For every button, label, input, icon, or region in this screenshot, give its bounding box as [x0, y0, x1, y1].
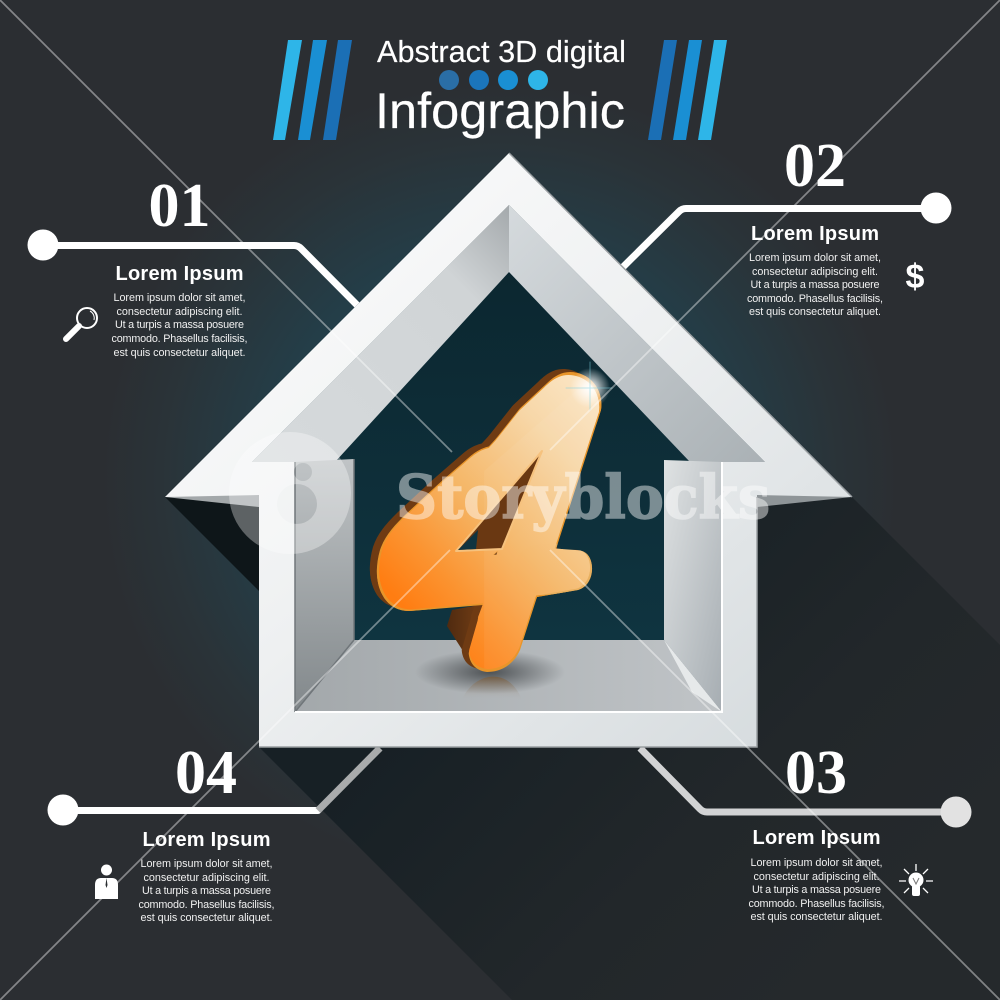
text block 03: consectetur adipiscing elit.	[754, 871, 880, 883]
numeral 4	[370, 362, 612, 672]
numeral: sparkle	[566, 362, 612, 410]
house	[165, 153, 852, 747]
text block 04: est quis consectetur aliquet.	[140, 912, 272, 924]
house: left underside	[165, 495, 259, 507]
icon: magnifier	[66, 308, 97, 339]
text block 02: commodo. Phasellus facilisis,	[747, 293, 883, 305]
text block 02: consectetur adipiscing elit.	[752, 266, 878, 278]
number 04: 04	[175, 739, 237, 807]
text block 03: Lorem ipsum dolor sit amet,	[750, 857, 882, 869]
house: right wall highlight	[664, 640, 722, 712]
icon: business person	[95, 864, 118, 899]
text block 03	[748, 827, 884, 923]
numeral: counter background sliver	[458, 530, 478, 550]
text block 04: consectetur adipiscing elit.	[144, 872, 270, 884]
house: right inner wall	[664, 460, 722, 712]
house: white frame	[165, 153, 852, 747]
numeral: brown back face: 4	[326, 306, 655, 743]
text block 03: Lorem Ipsum	[752, 827, 880, 849]
title text	[375, 35, 626, 139]
text block 02: Lorem Ipsum	[751, 223, 879, 245]
floor shadow under numeral	[415, 650, 565, 700]
house: right underside	[757, 495, 852, 507]
house: floor	[295, 640, 722, 712]
number 02: 02	[784, 132, 846, 200]
watermark wordmark: Storyblocks	[396, 463, 770, 533]
number 03: 03	[785, 739, 847, 807]
watermark logo circle	[229, 432, 351, 554]
numeral: counter	[456, 451, 542, 551]
numeral: orange rim	[376, 372, 602, 672]
long flat shadow of the house	[165, 497, 1000, 1000]
title dots	[439, 70, 548, 90]
text block 01: Lorem Ipsum	[116, 263, 244, 285]
text block 02	[747, 223, 883, 318]
numeral: brown back face	[370, 369, 579, 668]
icon: light bulb	[899, 864, 933, 896]
text block 01: Lorem ipsum dolor sit amet,	[114, 292, 246, 304]
title: stripes right	[648, 40, 727, 140]
house: roof inner left face	[252, 205, 509, 462]
numeral: front face: 4	[336, 315, 658, 742]
numeral: orange rim: 4	[333, 309, 662, 746]
text block 01: est quis consectetur aliquet.	[114, 347, 246, 359]
numeral: front face	[379, 375, 600, 669]
connector 01	[28, 230, 357, 305]
numeral: brown extrusion below crossbar	[447, 604, 490, 662]
house: roof inner right face	[509, 205, 765, 462]
icon: dollar sign: $	[906, 258, 925, 296]
number 01: 01	[148, 172, 210, 240]
text block 03: commodo. Phasellus facilisis,	[748, 898, 884, 910]
text block 02: Ut a turpis a massa posuere	[750, 279, 880, 291]
text block 01: consectetur adipiscing elit.	[116, 306, 242, 318]
title text: Abstract 3D digital	[377, 35, 626, 69]
connector 04	[48, 748, 380, 826]
text block 02: est quis consectetur aliquet.	[749, 306, 881, 318]
text block 01	[112, 263, 248, 359]
title: stripes left	[273, 40, 352, 140]
connector 03	[640, 748, 972, 828]
text block 01: commodo. Phasellus facilisis,	[112, 333, 248, 345]
connector 02	[622, 192, 952, 268]
text block 04: Lorem ipsum dolor sit amet,	[140, 858, 272, 870]
house: interior back wall	[335, 272, 690, 642]
text block 04: Lorem Ipsum	[142, 829, 270, 851]
text block 03: Ut a turpis a massa posuere	[752, 884, 881, 896]
text block 01: Ut a turpis a massa posuere	[115, 319, 244, 331]
text block 04: Ut a turpis a massa posuere	[142, 885, 271, 897]
title text: Infographic	[375, 82, 625, 139]
house: left inner wall	[295, 459, 354, 712]
text block 04	[138, 829, 274, 924]
text block 03: est quis consectetur aliquet.	[750, 911, 882, 923]
text block 02: Lorem ipsum dolor sit amet,	[749, 252, 881, 264]
text block 04: commodo. Phasellus facilisis,	[138, 899, 274, 911]
